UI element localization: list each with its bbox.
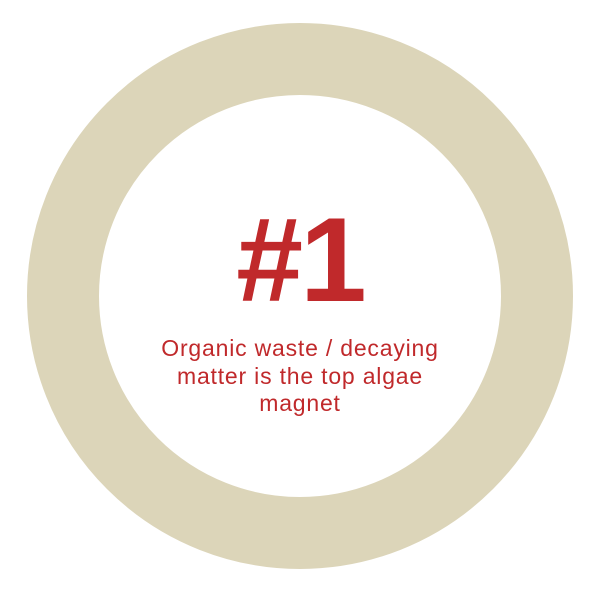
caption text: Organic waste / decaying [161,335,439,361]
headline number: #1 [236,193,364,327]
ring [63,59,537,533]
caption text: magnet [259,390,341,416]
caption text [161,335,439,416]
caption text: matter is the top algae [177,362,423,388]
